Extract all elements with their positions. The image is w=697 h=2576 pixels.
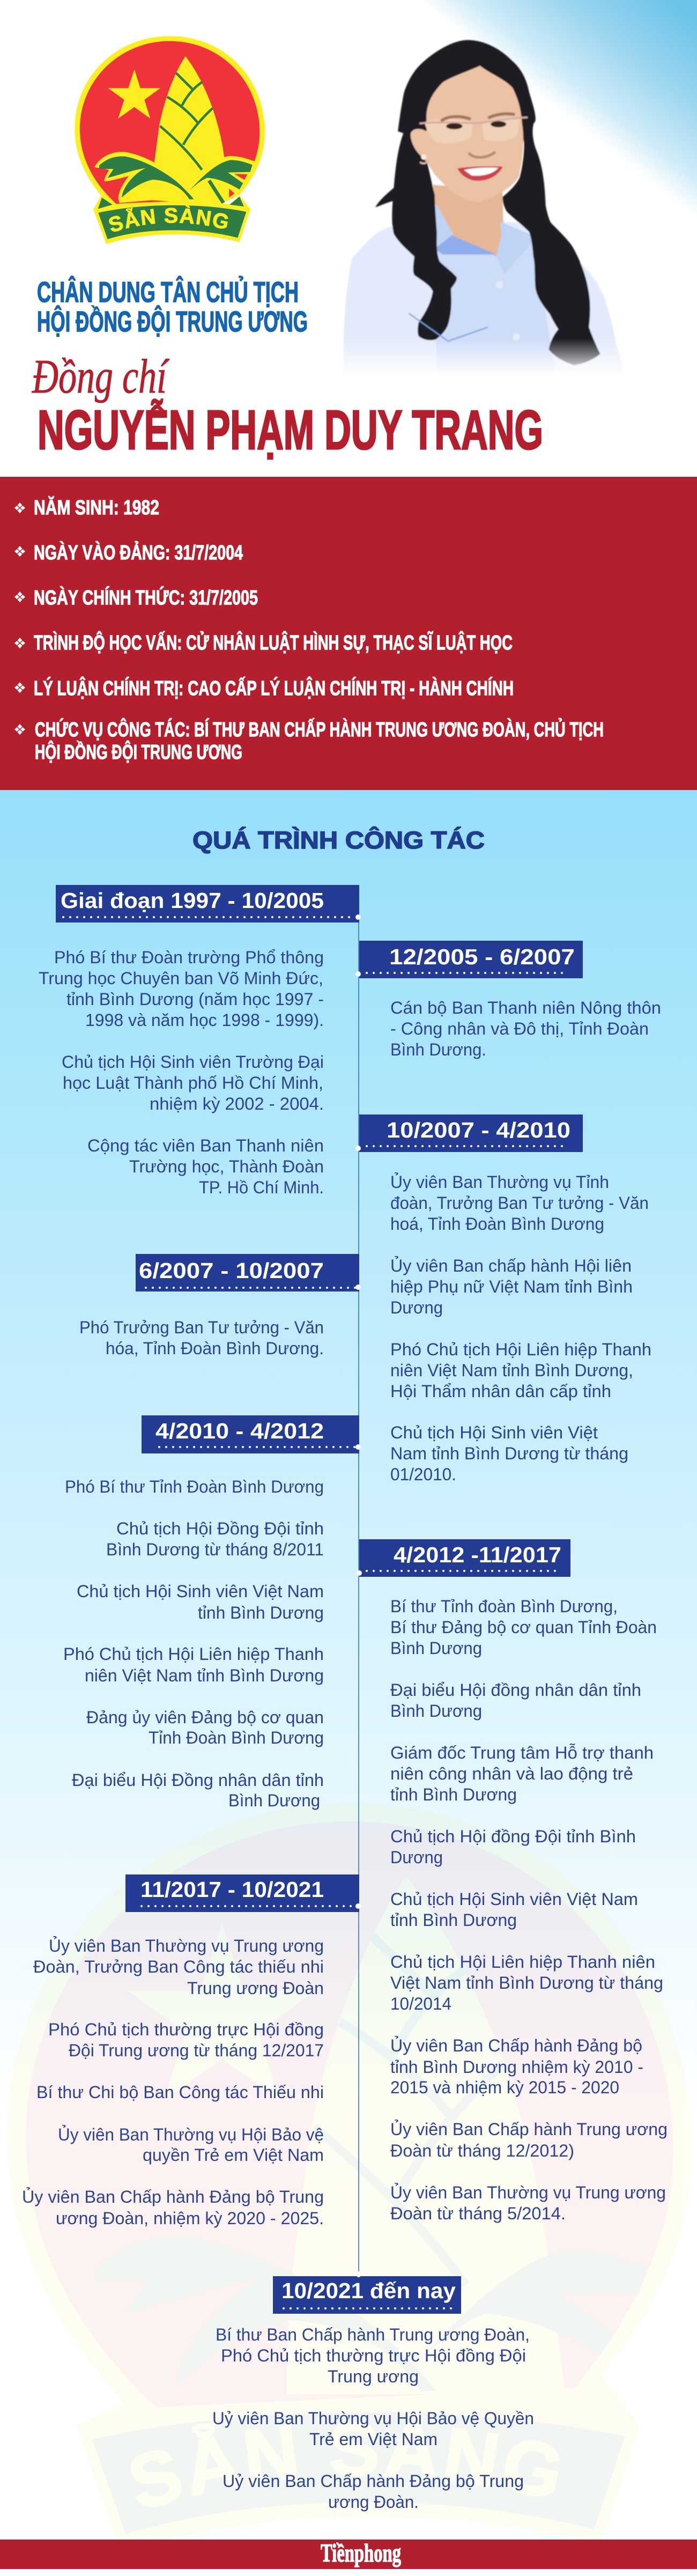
period text: Dương — [390, 1298, 443, 1317]
period text: Giám đốc Trung tâm Hỗ trợ thanh — [390, 1743, 654, 1762]
period: 11/2017 - 10/2021: 11/2017 - 10/2021 — [140, 1877, 324, 1902]
heading: portrait title — [37, 276, 308, 338]
period text: Đoàn từ tháng 5/2014. — [390, 2204, 566, 2223]
period: 11/2017 - 10/2021 — [22, 1874, 361, 2228]
smile — [457, 166, 503, 181]
period text: Đại biểu Hội đồng nhân dân tỉnh — [390, 1680, 641, 1700]
period text: Phó Bí thư Đoàn trường Phổ thông — [54, 948, 324, 967]
period: 1997 - 10/2005: Giai đoạn 1997 - 10/2005 — [61, 888, 324, 913]
period text: Nam tỉnh Bình Dương từ tháng — [390, 1444, 628, 1463]
period text: Phó Chủ tịch thường trực Hội đồng — [48, 2020, 324, 2039]
details text — [34, 496, 604, 764]
emblem outline — [75, 36, 265, 208]
period text — [212, 2325, 534, 2512]
period: 4/2010 - 4/2012 — [63, 1415, 361, 1810]
details text: HỘI ĐỒNG ĐỘI TRUNG ƯƠNG — [35, 740, 242, 764]
period text — [63, 1477, 324, 1810]
period text: Phó Chủ tịch Hội Liên hiệp Thanh — [63, 1644, 324, 1664]
corner gradient background — [375, 0, 697, 257]
heading: portrait title: CHÂN DUNG TÂN CHỦ TỊCH — [37, 276, 299, 308]
period text: Chủ tịch Hội Sinh viên Trường Đại — [62, 1052, 324, 1072]
period: 4/2012 - 11/2017 — [357, 1539, 668, 2223]
period text: Bí thư Chi bộ Ban Công tác Thiếu nhi — [36, 2083, 324, 2102]
period text: tỉnh Bình Dương — [198, 1603, 324, 1622]
period text — [390, 1597, 668, 2223]
period: 4/2012 - 11/2017: 4/2012 -11/2017 — [394, 1542, 561, 1567]
period text: Bình Dương — [390, 1638, 482, 1658]
period text: Ủy viên Ban chấp hành Hội liên — [390, 1256, 632, 1275]
period text: Phó Trưởng Ban Tư tưởng - Văn — [79, 1318, 324, 1337]
period: 10/2021 to present: 10/2021 đến nay — [281, 2278, 456, 2303]
period text: Chủ tịch Hội Sinh viên Việt Nam — [77, 1582, 324, 1601]
period text: TP. Hồ Chí Minh. — [199, 1178, 324, 1197]
period text: Cán bộ Ban Thanh niên Nông thôn — [390, 998, 661, 1017]
period text: niên Việt Nam tỉnh Bình Dương — [85, 1666, 324, 1685]
face — [411, 65, 523, 202]
details text: TRÌNH ĐỘ HỌC VẤN: CỬ NHÂN LUẬT HÌNH SỰ, THẠC SĨ LUẬT HỌC — [34, 630, 513, 654]
period text: Phó Chủ tịch Hội Liên hiệp Thanh — [390, 1340, 651, 1359]
period text: Trung học Chuyên ban Võ Minh Đức, — [39, 969, 323, 988]
period text: ương Đoàn, nhiệm kỳ 2020 - 2025. — [56, 2209, 324, 2228]
period text — [390, 998, 661, 1059]
period text — [22, 1936, 324, 2228]
shirt — [344, 201, 625, 374]
period text: Đảng ủy viên Đảng bộ cơ quan — [86, 1708, 324, 1727]
period text: Uỷ viên Ban Chấp hành Đảng bộ Trung — [223, 2471, 524, 2491]
period text: Chủ tịch Hội Liên hiệp Thanh niên — [390, 1952, 655, 1972]
period text: học Luật Thành phố Hồ Chí Minh, — [63, 1073, 323, 1093]
shirt front panel — [435, 240, 556, 374]
period: 6/2007 - 10/2007 — [79, 1254, 361, 1358]
period text: Tỉnh Đoàn Bình Dương — [149, 1728, 324, 1747]
period: 10/2021 to present — [212, 2273, 534, 2512]
period text: Bí thư Ban Chấp hành Trung ương Đoàn, — [216, 2325, 530, 2344]
panel: personal details — [0, 477, 697, 790]
bamboo shoot — [152, 56, 229, 200]
footer band with Tiền Phong logo: Tiềnphong — [321, 2539, 401, 2567]
period: 12/2005 - 6/2007 — [355, 941, 661, 1059]
watermark: faint youth emblem: SẴN SÀNG — [131, 2413, 560, 2507]
right leaf — [188, 156, 256, 203]
period text — [390, 1172, 651, 1484]
period text: ương Đoàn. — [328, 2492, 419, 2512]
details text: NGÀY CHÍNH THỨC: 31/7/2005 — [34, 586, 258, 609]
period text: Đội Trung ương từ tháng 12/2017 — [69, 2041, 324, 2060]
period text: Ủy viên Ban Chấp hành Đảng bộ — [390, 2036, 642, 2055]
period text: 10/2014 — [390, 1994, 451, 2013]
hair: right lock — [502, 115, 600, 365]
period text: Phó Bí thư Tỉnh Đoàn Bình Dương — [65, 1477, 324, 1496]
period text — [79, 1318, 324, 1358]
period text: Phó Chủ tịch thường trực Hội đồng Đội — [221, 2346, 526, 2365]
timeline section background — [0, 790, 697, 2120]
glasses — [425, 119, 473, 143]
earring — [421, 154, 426, 160]
period: 12/2005 - 6/2007: 12/2005 - 6/2007 — [389, 944, 575, 969]
period text: Hội Thẩm nhân dân cấp tỉnh — [390, 1382, 611, 1401]
portrait of Nguyễn Phạm Duy Trang — [334, 40, 634, 375]
period text: 01/2010. — [390, 1465, 456, 1484]
period text: Bình Dương từ tháng 8/2011 — [106, 1540, 324, 1559]
period text: Bình Dương — [228, 1791, 320, 1810]
hair: crown — [398, 40, 536, 144]
period text: Chủ tịch Hội Sinh viên Việt Nam — [390, 1889, 638, 1909]
period: 10/2007 - 4/2010: 10/2007 - 4/2010 — [387, 1118, 570, 1142]
period text: niên công nhân và lao động trẻ — [390, 1764, 633, 1783]
period: 1997 - 10/2005 — [39, 885, 361, 1197]
ribbon text: SẴN SÀNG — [109, 205, 228, 232]
watermark: faint youth emblem — [8, 1803, 692, 2540]
eyebrows and eyes — [441, 114, 515, 121]
period text: Đại biểu Hội Đồng nhân dân tỉnh — [72, 1770, 324, 1790]
period text: Đoàn, Trưởng Ban Công tác thiếu nhi — [33, 1957, 324, 1976]
details text: NĂM SINH: 1982 — [34, 496, 159, 519]
period text: hoá, Tỉnh Đoàn Bình Dương — [390, 1214, 604, 1234]
period text — [39, 948, 324, 1197]
red field — [80, 41, 259, 204]
period text: 1998 và năm học 1998 - 1999). — [85, 1010, 324, 1030]
period text: Bí thư Đảng bộ cơ quan Tỉnh Đoàn — [390, 1618, 657, 1637]
bottom fade — [334, 338, 634, 375]
period text: tỉnh Bình Dương — [390, 1910, 517, 1930]
left leaf — [94, 152, 195, 203]
collar — [433, 200, 496, 255]
heading: portrait title: HỘI ĐỒNG ĐỘI TRUNG ƯƠNG — [37, 305, 308, 338]
period text: tỉnh Bình Dương — [390, 1785, 517, 1804]
period: 4/2010 - 4/2012: 4/2010 - 4/2012 — [155, 1419, 324, 1443]
nose shadow — [469, 152, 495, 157]
period text: Cộng tác viên Ban Thanh niên — [87, 1136, 324, 1155]
period text: Trung ương Đoàn — [187, 1979, 324, 1998]
bullet icons — [14, 503, 25, 735]
period text: niên Việt Nam tỉnh Bình Dương, — [390, 1361, 633, 1380]
period text: Trẻ em Việt Nam — [309, 2430, 438, 2449]
star — [108, 69, 160, 119]
period: 6/2007 - 10/2007: 6/2007 - 10/2007 — [139, 1258, 324, 1283]
period text: 2015 và nhiệm kỳ 2015 - 2020 — [390, 2078, 619, 2097]
hair: left lock — [375, 131, 457, 340]
period text: hóa, Tỉnh Đoàn Bình Dương. — [106, 1339, 324, 1358]
period text: Trung ương — [328, 2367, 419, 2386]
period text: hiệp Phụ nữ Việt Nam tỉnh Bình — [390, 1277, 633, 1296]
details text: NGÀY VÀO ĐẢNG: 31/7/2004 — [34, 541, 243, 564]
period text: Chủ tịch Hội Đồng Đội tỉnh — [116, 1519, 324, 1538]
period text: Ủy viên Ban Thường vụ Hội Bảo vệ — [58, 2125, 324, 2144]
period text: Chủ tịch Hội Sinh viên Việt — [390, 1423, 598, 1442]
period text: Việt Nam tỉnh Bình Dương từ tháng — [390, 1973, 663, 1992]
footer band with Tiền Phong logo — [0, 2539, 697, 2569]
period text: Bí thư Tỉnh đoàn Bình Dương, — [390, 1597, 618, 1616]
shirt buttons and pocket — [496, 281, 503, 289]
period text: Dương — [390, 1848, 443, 1867]
period text: Trường học, Thành Đoàn — [129, 1157, 324, 1176]
period text: Bình Dương. — [390, 1040, 486, 1059]
period text: Ủy viên Ban Thường vụ Tỉnh — [390, 1172, 609, 1192]
period text: Đoàn từ tháng 12/2012) — [390, 2141, 574, 2160]
period text: - Công nhân và Đô thị, Tỉnh Đoàn — [390, 1019, 649, 1038]
heading: comrade script: Đồng chí — [31, 350, 169, 403]
timeline spine — [358, 917, 359, 2271]
period text: Ủy viên Ban Thường vụ Trung ương — [390, 2183, 666, 2202]
period text: tỉnh Bình Dương (năm học 1997 - — [66, 990, 324, 1009]
period text: Ủy viên Ban Chấp hành Trung ương — [390, 2120, 668, 2139]
period: 10/2007 - 4/2010 — [355, 1114, 651, 1484]
details text: LÝ LUẬN CHÍNH TRỊ: CAO CẤP LÝ LUẬN CHÍNH TRỊ - HÀNH CHÍNH — [34, 676, 514, 700]
period text: Ủy viên Ban Thường vụ Trung ương — [49, 1936, 324, 1955]
period text: đoàn, Trưởng Ban Tư tưởng - Văn — [390, 1193, 649, 1213]
period text: quyền Trẻ em Việt Nam — [143, 2145, 324, 2165]
heading: work history: QUÁ TRÌNH CÔNG TÁC — [192, 826, 485, 854]
period text: Chủ tịch Hội đồng Đội tỉnh Bình — [390, 1827, 636, 1846]
period text: Ủy viên Ban Chấp hành Đảng bộ Trung — [22, 2187, 324, 2206]
logo: Đội emblem — [75, 36, 265, 244]
ribbon — [93, 196, 250, 244]
period text: Bình Dương — [390, 1701, 482, 1721]
neck — [433, 184, 503, 256]
period text: Uỷ viên Ban Thường vụ Hội Bảo vệ Quyền — [212, 2409, 534, 2428]
period text: nhiệm kỳ 2002 - 2004. — [150, 1094, 324, 1113]
period text: tỉnh Bình Dương nhiệm kỳ 2010 - — [390, 2057, 643, 2077]
